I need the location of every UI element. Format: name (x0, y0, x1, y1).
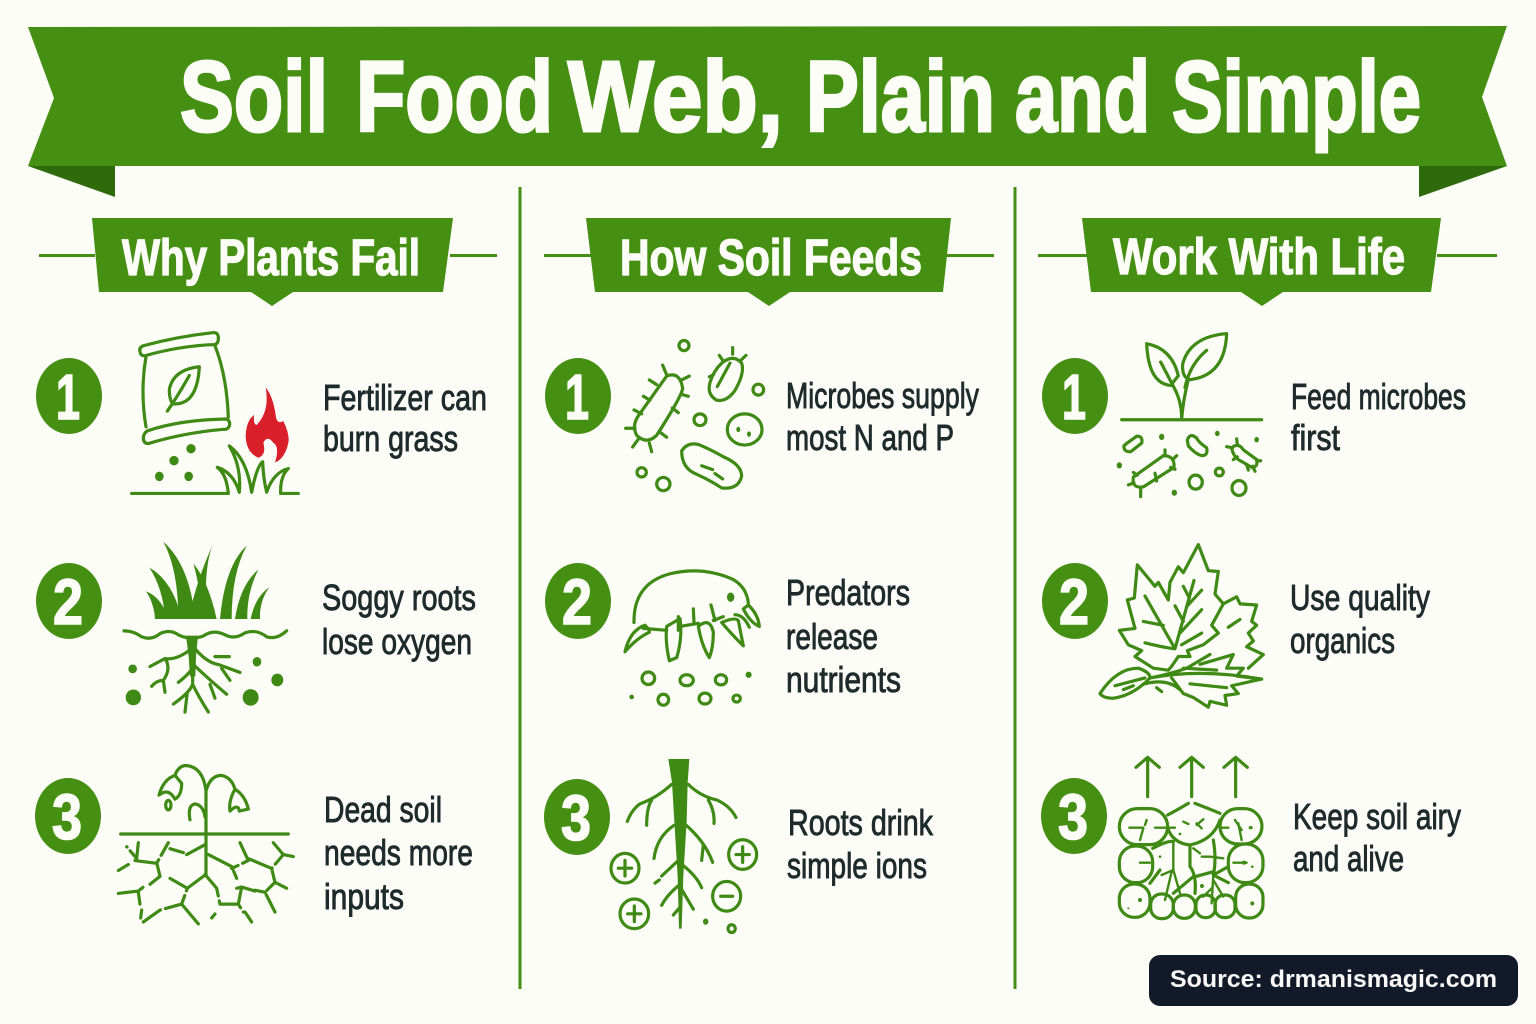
text: microbes supply most N and P (786, 375, 979, 458)
text: keep soil airy and alive: and alive (1293, 838, 1404, 879)
heading: how soil feeds: How Soil Feeds (620, 229, 922, 286)
text: soggy roots lose oxygen: lose oxygen (322, 621, 472, 662)
number 1: 1 (56, 361, 80, 433)
text: microbes supply most N and P: most N and P (786, 417, 954, 458)
text: use quality organics: Use quality (1290, 577, 1430, 618)
text: use quality organics: organics (1290, 620, 1395, 661)
text: dead soil needs more inputs (324, 789, 473, 917)
number 3 (1041, 778, 1107, 854)
title ribbon: Plain (806, 41, 995, 153)
number 3: 3 (561, 782, 591, 854)
title ribbon: and (1015, 41, 1150, 153)
text: predators release nutrients (786, 572, 910, 700)
icon: soggy roots (124, 542, 287, 712)
text: fertilizer can burn grass (323, 377, 487, 459)
source badge: Source: drmanismagic.com (1170, 966, 1497, 993)
heading: why plants fail (39, 218, 497, 306)
title ribbon (28, 26, 1507, 197)
number 2 (1042, 563, 1108, 639)
text: roots drink simple ions (787, 802, 934, 886)
title ribbon: Food (356, 41, 553, 153)
title ribbon: Simple (1172, 41, 1421, 153)
text: keep soil airy and alive (1293, 796, 1461, 879)
number 3 (35, 778, 101, 854)
text: dead soil needs more inputs: inputs (324, 876, 404, 917)
heading: how soil feeds (544, 218, 994, 306)
number 2 (545, 563, 611, 639)
text: roots drink simple ions: simple ions (787, 845, 927, 886)
number 1: 1 (565, 361, 589, 433)
heading: why plants fail: Why Plants Fail (122, 229, 420, 286)
text: use quality organics (1290, 577, 1430, 661)
icon: roots with ions (611, 759, 757, 933)
text: fertilizer can burn grass: Fertilizer can (323, 377, 487, 418)
text: predators release nutrients: Predators (786, 572, 910, 613)
source badge (1149, 955, 1518, 1006)
number 2: 2 (1059, 566, 1089, 638)
number 2 (36, 563, 102, 639)
text: predators release nutrients: release (786, 616, 878, 657)
text: keep soil airy and alive: Keep soil airy (1293, 796, 1461, 837)
text: feed microbes first: first (1291, 417, 1340, 458)
text: microbes supply most N and P: Microbes supply (786, 375, 979, 416)
icon: fertilizer bag burning grass (132, 333, 298, 493)
text: dead soil needs more inputs: needs more (324, 832, 473, 873)
number 3 (544, 779, 610, 855)
title ribbon: Soil (180, 41, 328, 153)
title ribbon: Web, (568, 41, 783, 153)
panel: why plants fail (35, 218, 497, 924)
text: feed microbes first (1291, 376, 1466, 458)
text: predators release nutrients: nutrients (786, 659, 901, 700)
panel: how soil feeds (544, 218, 994, 933)
text: fertilizer can burn grass: burn grass (323, 418, 458, 459)
icon: airy soil aggregates with arrows (1119, 757, 1263, 919)
number 1 (545, 358, 611, 434)
icon: wilted plant in dead soil (118, 766, 293, 924)
number 1: 1 (1062, 361, 1086, 433)
heading: work with life (1038, 218, 1497, 306)
number 2: 2 (53, 566, 83, 638)
text: soggy roots lose oxygen (322, 577, 476, 662)
text: roots drink simple ions: Roots drink (788, 802, 934, 843)
text: dead soil needs more inputs: Dead soil (324, 789, 442, 830)
icon: microbes (626, 341, 764, 491)
number 1 (36, 358, 102, 434)
icon: organic leaves (1100, 545, 1263, 707)
icon: seedling over microbes (1117, 334, 1262, 497)
panel: work with life (1038, 218, 1497, 919)
text: feed microbes first: Feed microbes (1291, 376, 1466, 417)
number 2: 2 (562, 566, 592, 638)
text: soggy roots lose oxygen: Soggy roots (322, 577, 476, 618)
heading: work with life: Work With Life (1113, 228, 1405, 285)
number 1 (1042, 358, 1108, 434)
number 3: 3 (52, 781, 82, 853)
number 3: 3 (1058, 781, 1088, 853)
icon: predator mite (625, 571, 759, 705)
